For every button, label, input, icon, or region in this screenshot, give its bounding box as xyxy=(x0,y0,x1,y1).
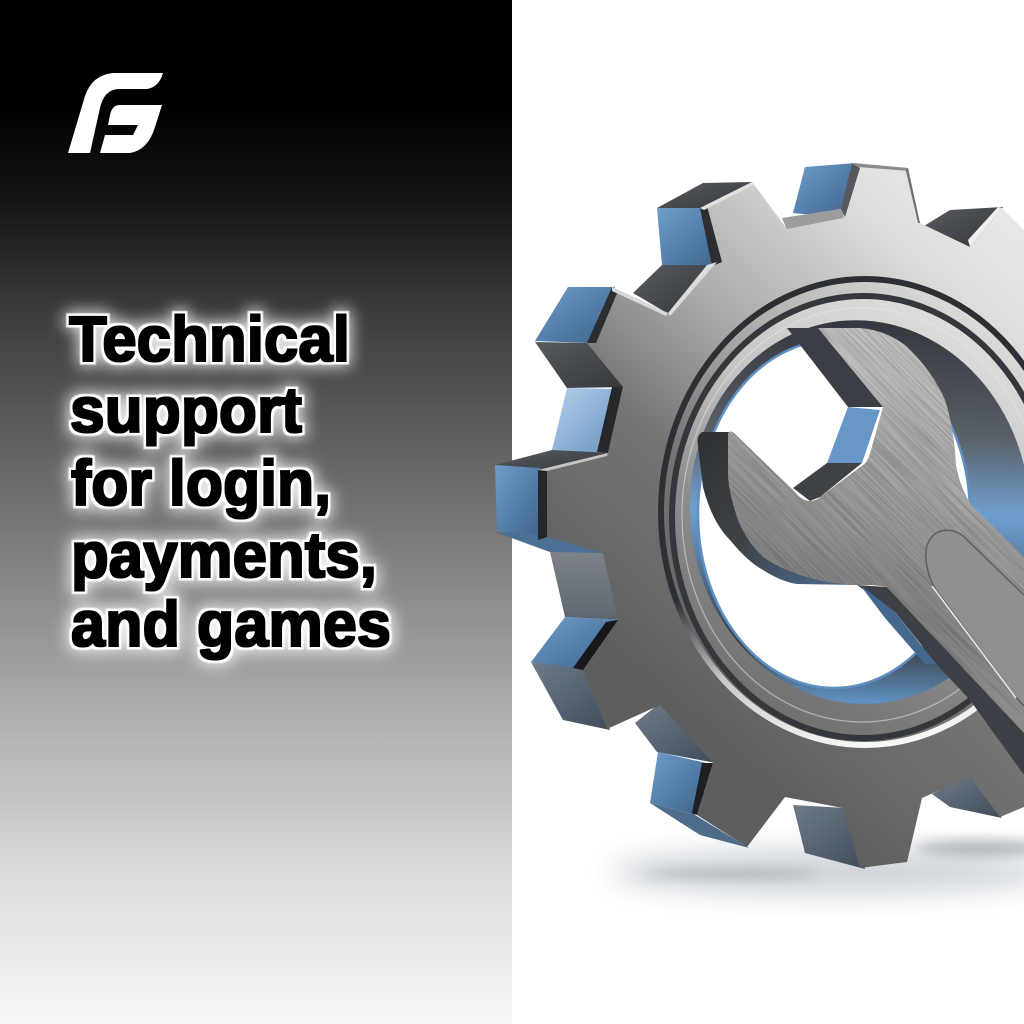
headline text with white outline and glow xyxy=(69,303,391,660)
wrench brushed metal texture xyxy=(728,328,1024,732)
headline text with white outline and glow: Technical xyxy=(69,303,350,375)
wrench handle side wall xyxy=(857,585,1024,775)
wrench handle recess xyxy=(926,530,1024,706)
gear hub ring grooves xyxy=(661,279,1024,745)
gear chamfer edges xyxy=(538,163,1002,815)
headline text with white outline and glow: for login, xyxy=(71,447,331,519)
headline text with white outline and glow: payments, xyxy=(71,519,377,591)
logo: white FG mark xyxy=(68,73,163,153)
gear center hole with inner wall xyxy=(690,320,1024,704)
ground shadow under gear xyxy=(610,840,1024,894)
wrench lower jaw side wall xyxy=(698,432,880,585)
headline text with white outline and glow: support xyxy=(70,374,302,446)
headline text with white outline and glow: and games xyxy=(71,588,391,660)
wrench upper jaw side walls xyxy=(787,328,883,501)
panel: dark gradient background xyxy=(0,0,512,1024)
wrench front face xyxy=(728,328,1024,733)
gear: metal cog with blue tooth sides xyxy=(495,163,1024,869)
gear tooth side faces xyxy=(495,163,1003,869)
gear front face xyxy=(538,163,1024,868)
wrench xyxy=(698,328,1024,775)
